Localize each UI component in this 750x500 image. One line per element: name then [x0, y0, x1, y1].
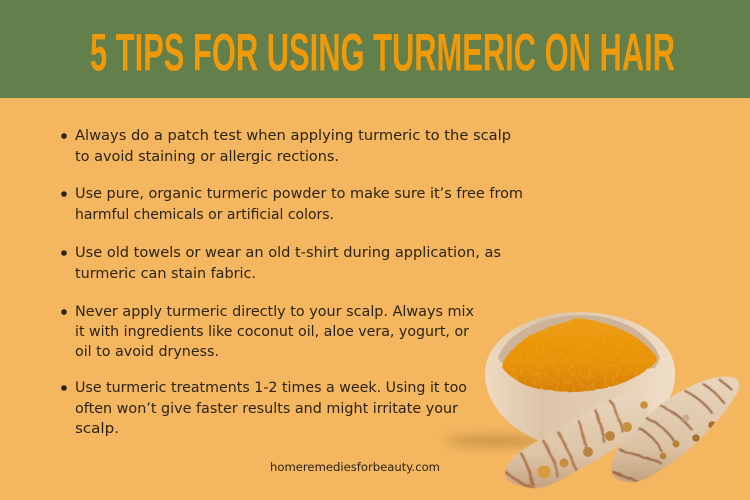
icon: turmeric root right — [612, 377, 739, 482]
tip 5 — [61, 380, 467, 437]
icon: wooden bowl — [485, 312, 675, 442]
tip 2: harmful chemicals or artificial colors. — [75, 207, 334, 223]
tip 4: it with ingredients like coconut oil, aloe vera, yogurt, or — [75, 324, 469, 340]
tip 3 — [61, 245, 501, 282]
tip 1: to avoid staining or allergic rections. — [75, 149, 339, 165]
icon: turmeric powder — [502, 318, 657, 392]
illustration: turmeric bowl and roots — [445, 312, 739, 489]
bowl shadow — [445, 435, 545, 447]
footer website: homeremediesforbeauty.com — [270, 460, 440, 474]
header band — [0, 0, 750, 98]
tip 2 — [61, 186, 523, 223]
icon: turmeric root left — [505, 395, 649, 489]
tip 5: scalp. — [75, 421, 119, 437]
tip 1 — [61, 128, 511, 165]
tip 3: turmeric can stain fabric. — [75, 266, 256, 282]
tip 1: Always do a patch test when applying turmeric to the scalp — [75, 128, 511, 144]
tip 3: Use old towels or wear an old t-shirt during application, as — [75, 245, 501, 261]
tip 4: oil to avoid dryness. — [75, 344, 219, 360]
tips list — [61, 128, 523, 437]
tip 4 — [61, 304, 474, 360]
tip 4: Never apply turmeric directly to your scalp. Always mix — [75, 304, 474, 320]
tip 5: often won’t give faster results and might irritate your — [75, 401, 458, 417]
tip 5: Use turmeric treatments 1-2 times a week. Using it too — [75, 380, 467, 396]
tip 2: Use pure, organic turmeric powder to make sure it’s free from — [75, 186, 523, 202]
